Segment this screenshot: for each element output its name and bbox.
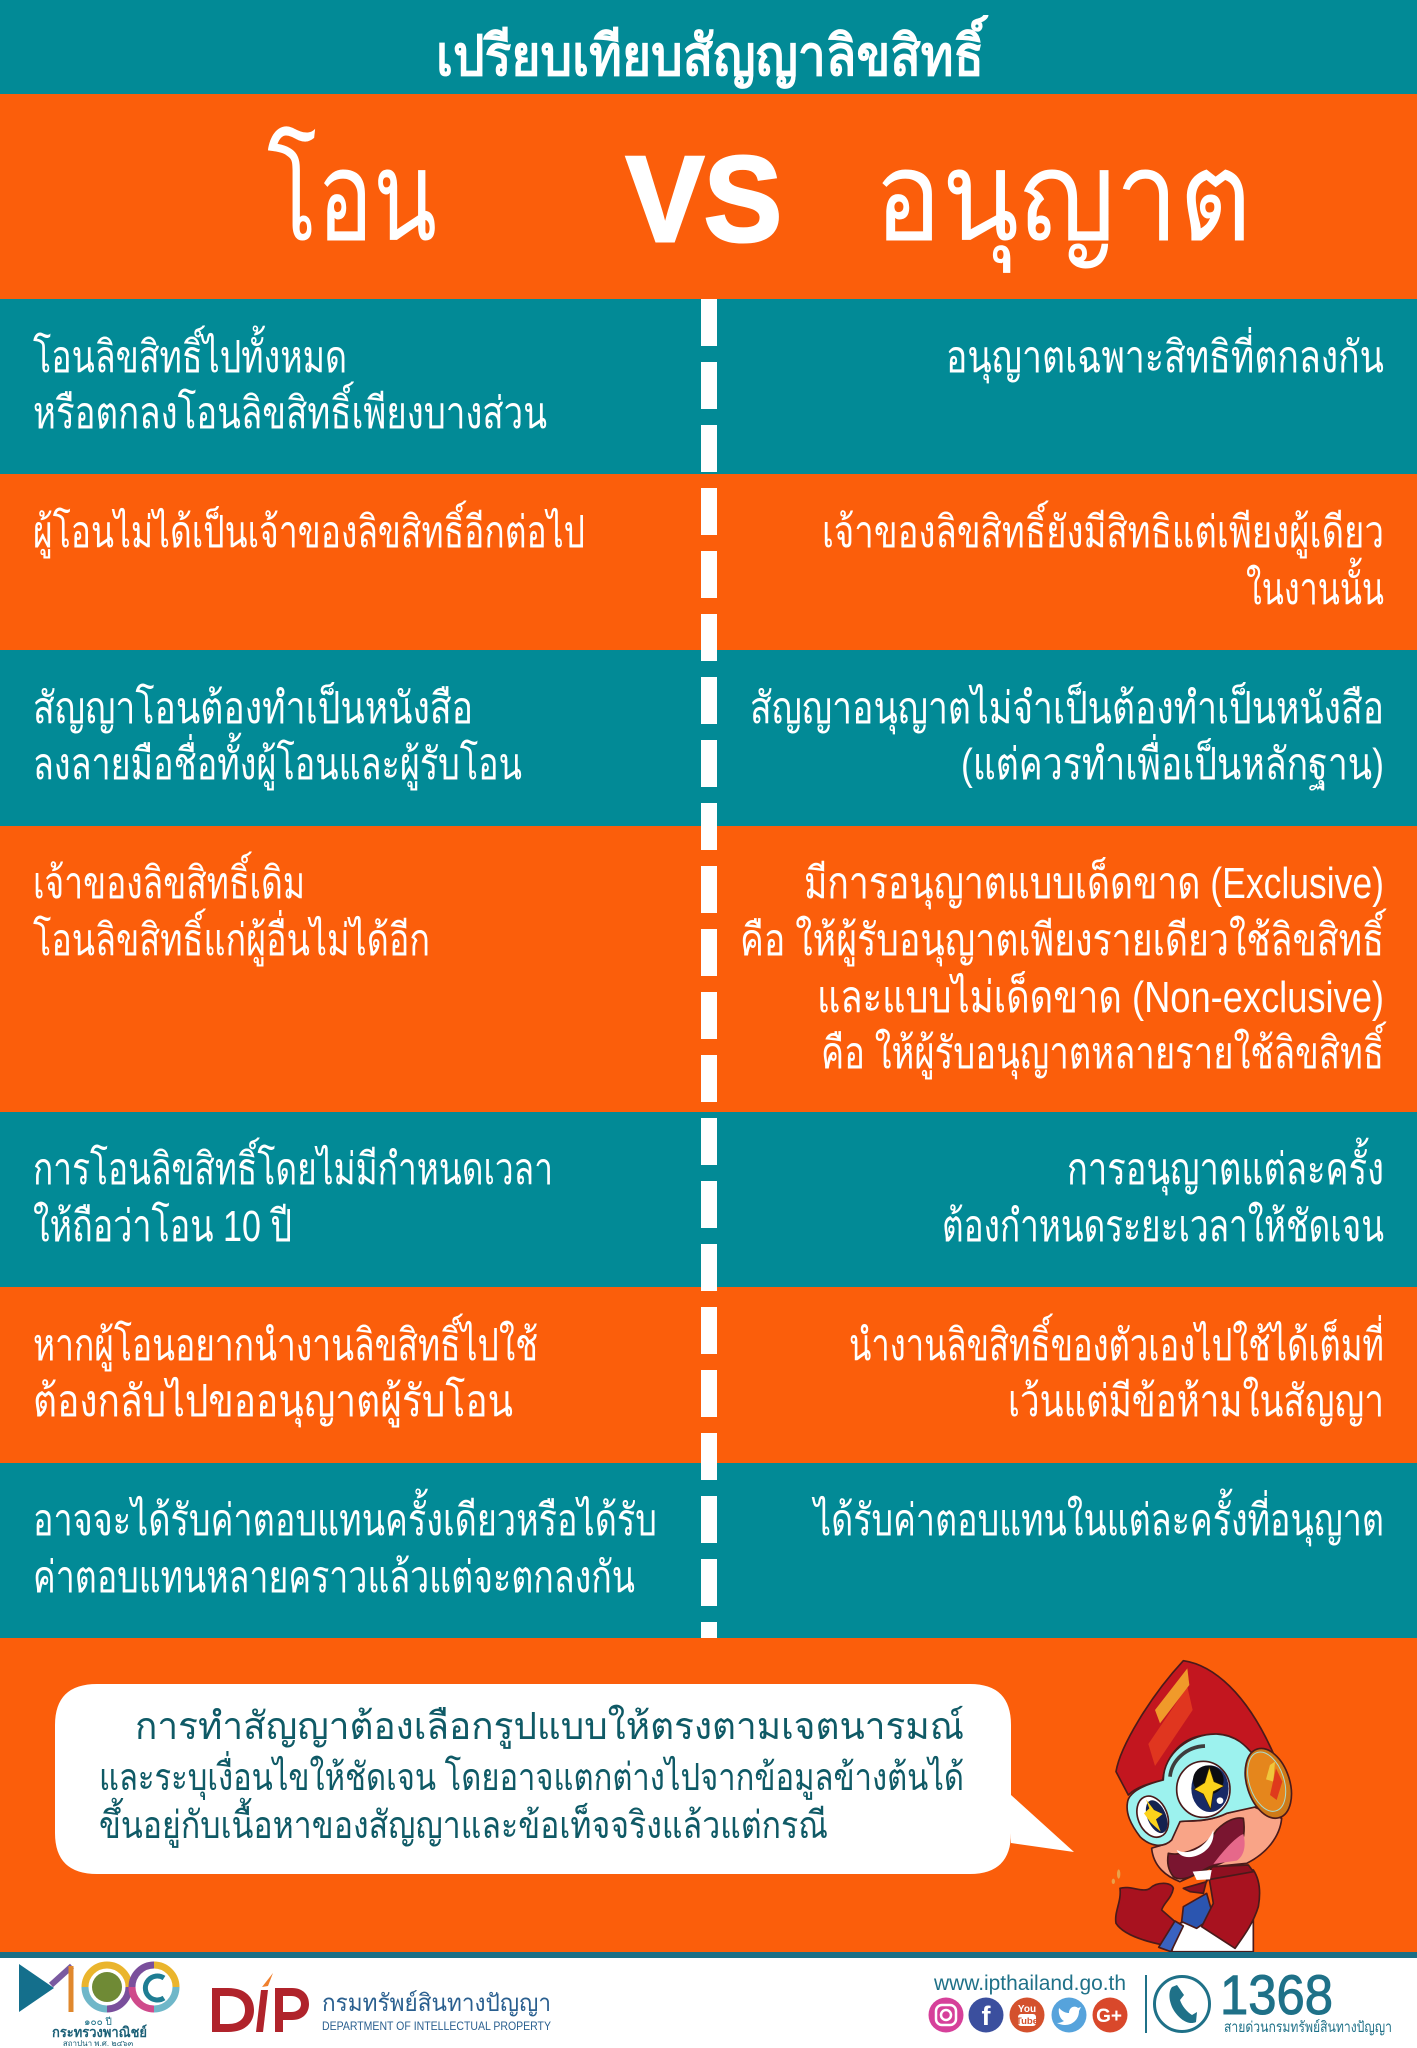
row 7: ค่าตอบแทนหลายคราวแล้วแต่จะตกลงกัน (33, 1553, 635, 1602)
icon: facebook: f (982, 2001, 992, 2031)
icon: instagram (928, 1998, 964, 2032)
icon: youtube: You (1018, 2004, 1036, 2015)
row 5: การโอนลิขสิทธิ์โดยไม่มีกำหนดเวลา (33, 1137, 553, 1194)
icon: google plus: G+ (1096, 2006, 1122, 2027)
row 1 (0, 299, 1417, 474)
row 6: หากผู้โอนอยากนำงานลิขสิทธิ์ไปใช้ (33, 1313, 538, 1372)
row 6 (0, 1287, 1417, 1463)
logo: ministry of commerce 100 years: กระทรวงพาณิชย์ (52, 2024, 147, 2040)
mascot glove (1116, 1883, 1175, 1945)
row 3: ลงลายมือชื่อทั้งผู้โอนและผู้รับโอน (33, 732, 522, 791)
title banner (0, 0, 1417, 94)
website url: www.ipthailand.go.th (933, 1972, 1126, 1995)
row 1: โอนลิขสิทธิ์ไปทั้งหมด (33, 325, 347, 382)
hotline number: 1368 (1220, 1963, 1333, 2026)
footer divider (1145, 1975, 1147, 2033)
row 7 (0, 1463, 1417, 1638)
title banner: เปรียบเทียบสัญญาลิขสิทธิ์ (436, 15, 989, 89)
row 4: เจ้าของลิขสิทธิ์เดิม (33, 851, 305, 908)
logo: ministry of commerce 100 years: สถาปนา พ.ศ. ๒๔๖๓ (63, 2039, 134, 2048)
callout speech bubble: การทำสัญญาต้องเลือกรูปแบบให้ตรงตามเจตนารมณ์ (135, 1705, 964, 1749)
logo: DIP department of intellectual property: DEPARTMENT OF INTELLECTUAL PROPERTY (322, 2021, 551, 2033)
heading: transfer: โอน (267, 126, 437, 267)
icon: youtube (1010, 1998, 1044, 2032)
callout speech bubble: และระบุเงื่อนไขให้ชัดเจน โดยอาจแตกต่างไปจากข้อมูลข้างต้นได้ (99, 1751, 964, 1800)
footer stripe (0, 1952, 1417, 1958)
icon: mascot character (1112, 1661, 1300, 1952)
heading: license: อนุญาต (874, 126, 1252, 273)
icon: facebook (968, 1998, 1004, 2032)
mascot hat (1116, 1661, 1273, 1795)
row 2 (0, 474, 1417, 650)
icon: twitter (1052, 1998, 1086, 2032)
hotline number (1220, 1963, 1392, 2036)
mascot earpiece (1237, 1743, 1300, 1824)
mascot goggles (1127, 1734, 1257, 1845)
mascot sparkle (1112, 1869, 1120, 1884)
mascot face (1152, 1807, 1282, 1882)
callout speech bubble (55, 1684, 1074, 1874)
bottom panel (0, 1638, 1417, 1952)
logo: ministry of commerce 100 years (19, 1964, 176, 2048)
row 7: อาจจะได้รับค่าตอบแทนครั้งเดียวหรือได้รับ (33, 1488, 657, 1545)
icon: google plus (1092, 1998, 1128, 2032)
row 4 (0, 826, 1417, 1112)
row 2: ผู้โอนไม่ได้เป็นเจ้าของลิขสิทธิ์อีกต่อไป (33, 500, 585, 559)
heading: VS: VS (626, 131, 782, 267)
row 3 (0, 650, 1417, 826)
icon: youtube: Tube (1016, 2016, 1038, 2027)
callout speech bubble: ขึ้นอยู่กับเนื้อหาของสัญญาและข้อเท็จจริงแล้วแต่กรณี (99, 1797, 828, 1848)
row 4: โอนลิขสิทธิ์แก่ผู้อื่นไม่ได้อีก (33, 908, 430, 967)
row 3: สัญญาโอนต้องทำเป็นหนังสือ (33, 682, 473, 733)
row 6: ต้องกลับไปขออนุญาตผู้รับโอน (33, 1376, 513, 1428)
row 5: ให้ถือว่าโอน 10 ปี (33, 1201, 292, 1251)
logo: DIP department of intellectual property: กรมทรัพย์สินทางปัญญา (322, 1989, 551, 2017)
heading panel: transfer vs license (0, 94, 1417, 299)
icon: telephone (1154, 1976, 1210, 2032)
logo: DIP department of intellectual property (212, 1973, 551, 2033)
mascot white shirt and arm (1172, 1907, 1253, 1952)
mascot jacket (1202, 1870, 1260, 1948)
dashed center divider (701, 299, 717, 1638)
row 1: หรือตกลงโอนลิขสิทธิ์เพียงบางส่วน (33, 381, 547, 438)
row 5 (0, 1112, 1417, 1287)
logo: ministry of commerce 100 years: ๑๐๐ ปี (84, 2016, 112, 2028)
